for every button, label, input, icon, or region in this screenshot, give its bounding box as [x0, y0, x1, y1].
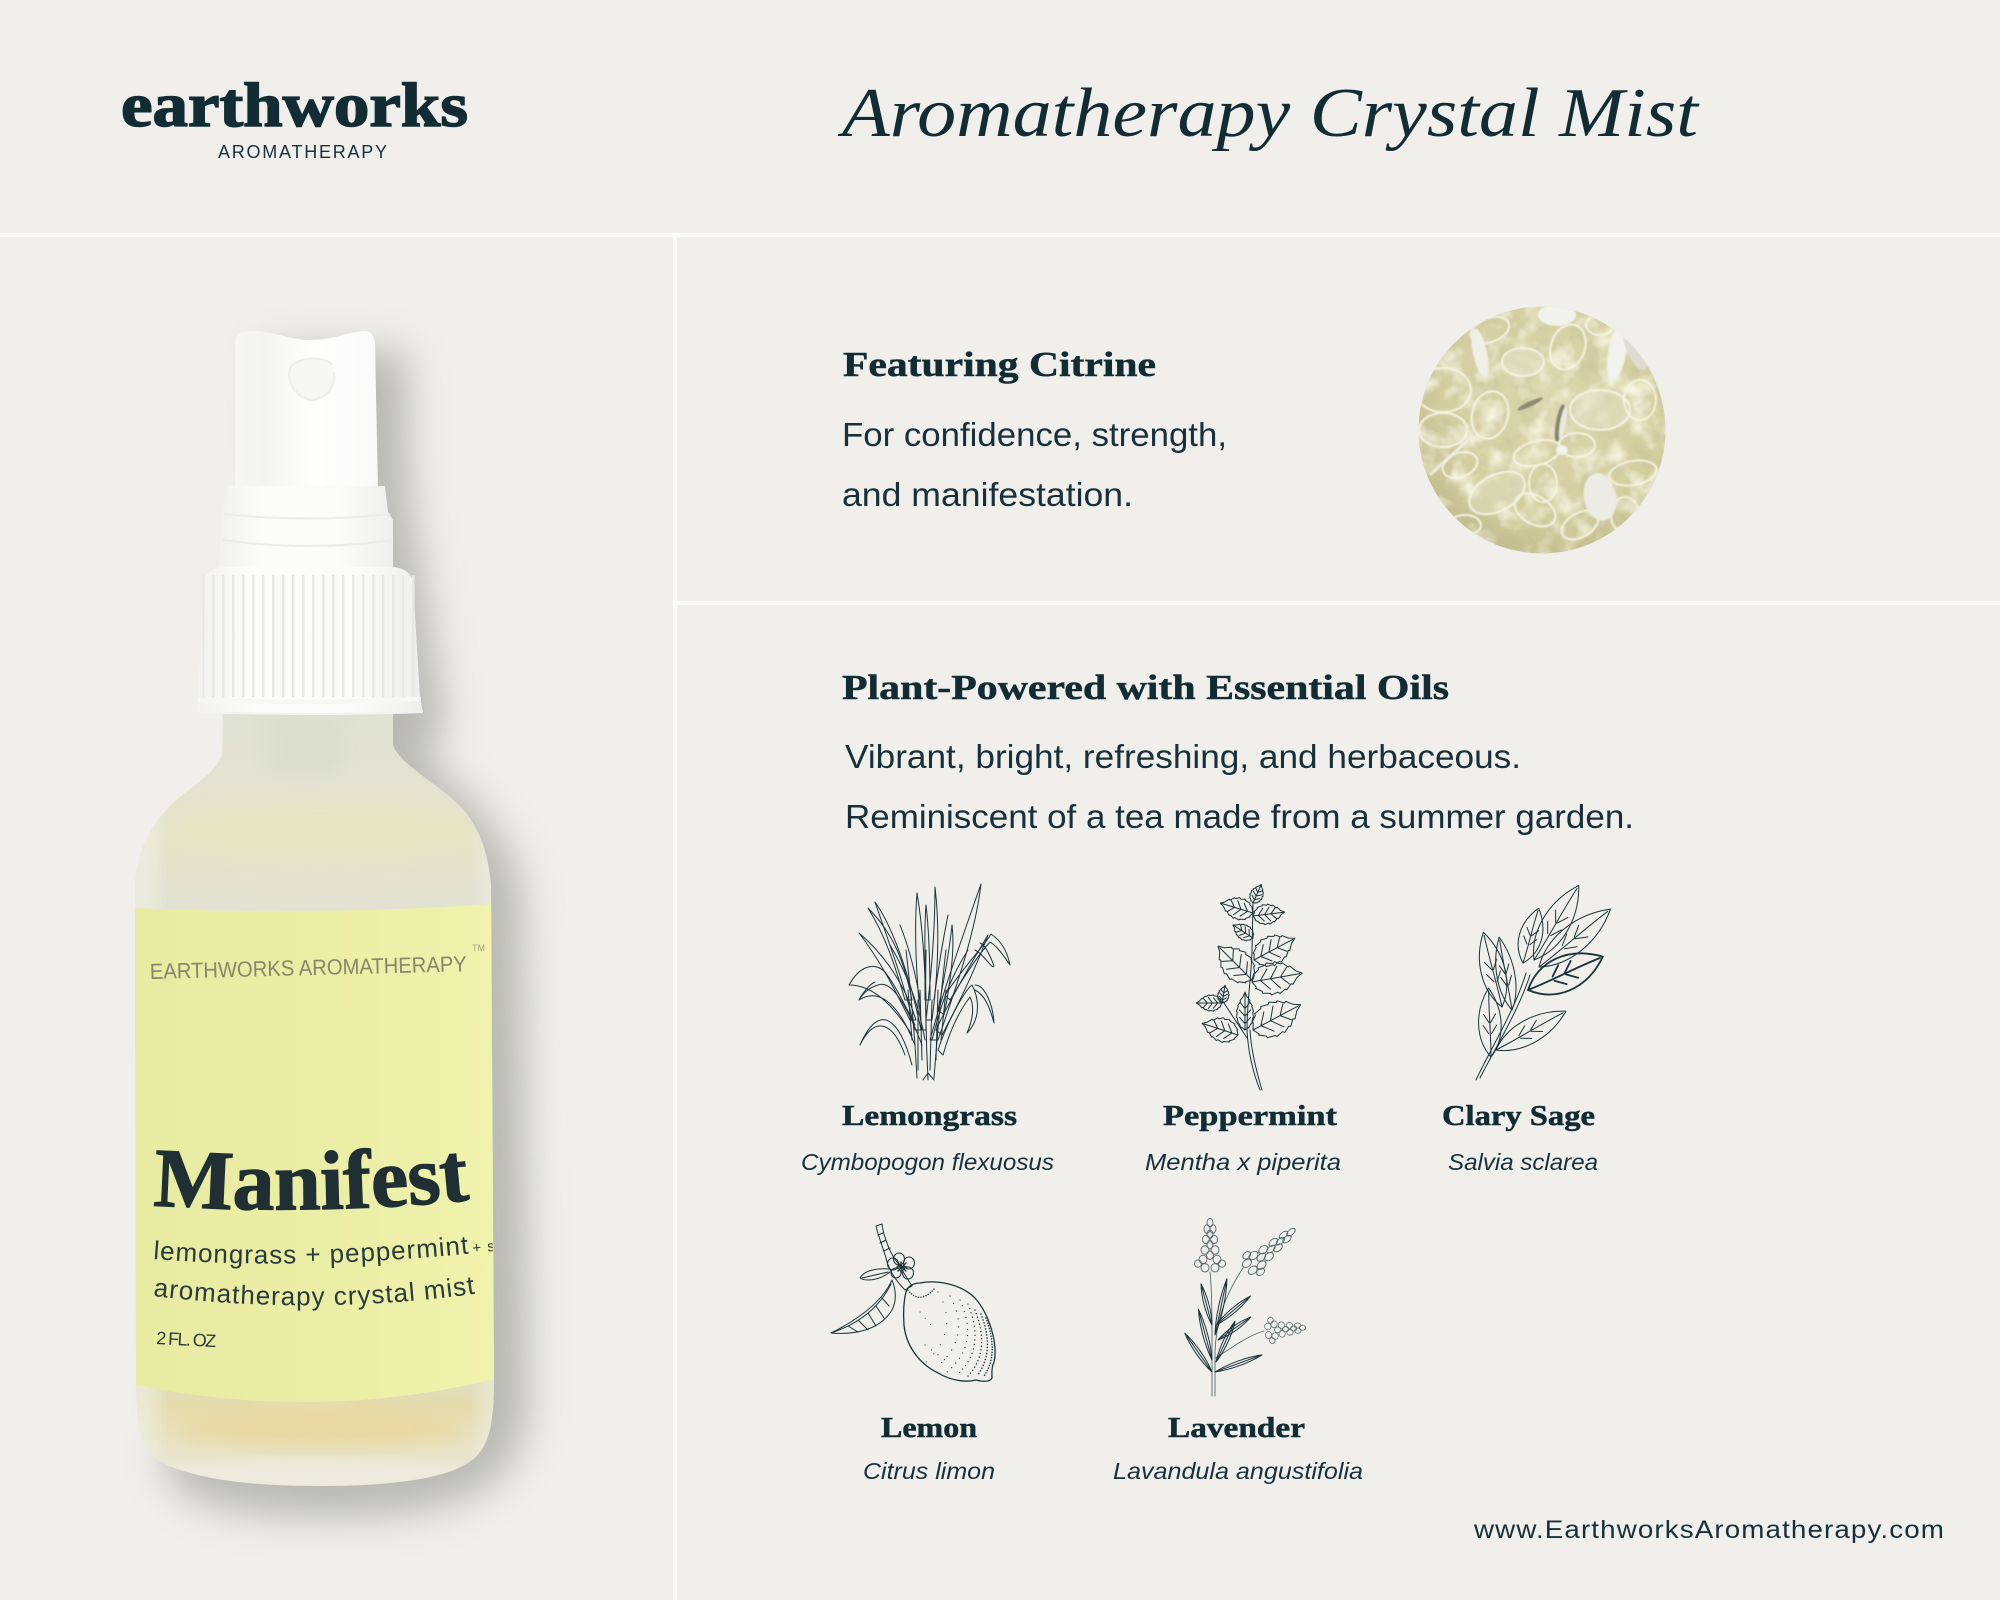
oils description: Vibrant, bright, refreshing, and herbaceous. — [845, 738, 1521, 775]
label text — [151, 944, 493, 1348]
panel: essential oils — [801, 668, 1634, 1484]
logo: earthworks aromatherapy — [121, 72, 468, 162]
icon: clary sage — [1472, 878, 1619, 1080]
label text: EARTHWORKS AROMATHERAPY — [150, 951, 467, 984]
label: lavender — [1113, 1413, 1363, 1484]
website url: www.EarthworksAromatherapy.com — [1473, 1516, 1945, 1544]
label: clary sage: Clary Sage — [1442, 1101, 1595, 1132]
label — [134, 904, 495, 1402]
collar — [219, 486, 393, 568]
label: peppermint: Mentha x piperita — [1145, 1149, 1341, 1175]
citrine description: For confidence, strength, — [842, 416, 1227, 453]
bottle shadow — [165, 350, 528, 1517]
label: lemongrass: Lemongrass — [842, 1101, 1017, 1132]
citrine description — [842, 416, 1227, 513]
label: lemongrass — [801, 1101, 1055, 1175]
blossom — [888, 1253, 914, 1279]
label: clary sage — [1442, 1101, 1598, 1175]
citrine crystal photo — [1415, 304, 1670, 555]
label text: Manifest — [154, 1148, 470, 1211]
label text: aromatherapy crystal mist — [154, 1277, 475, 1311]
label: lavender: Lavender — [1168, 1413, 1305, 1444]
oils description: Reminiscent of a tea made from a summer garden. — [845, 798, 1634, 835]
logo: earthworks aromatherapy: earthworks — [121, 72, 468, 140]
label: lemongrass: Cymbopogon flexuosus — [801, 1149, 1055, 1175]
label: lemon: Lemon — [881, 1413, 977, 1444]
label text: TM — [472, 943, 485, 953]
spray pump — [235, 331, 378, 490]
label: lemon — [863, 1413, 995, 1484]
panel: featuring citrine — [842, 304, 1670, 555]
product photo: Manifest spray bottle — [135, 329, 548, 1538]
label: lemon: Citrus limon — [863, 1458, 995, 1484]
title: Aromatherapy Crystal Mist — [838, 75, 1700, 152]
label text: lemongrass + peppermint + sage — [154, 1237, 493, 1268]
oils description — [845, 738, 1634, 835]
logo: earthworks aromatherapy: AROMATHERAPY — [218, 142, 387, 162]
glass body — [135, 714, 494, 1486]
label text: 2 FL. OZ — [156, 1328, 217, 1351]
label: peppermint — [1145, 1101, 1341, 1175]
heading: plant-powered with essential oils: Plant-Powered with Essential Oils — [842, 668, 1449, 707]
icon: peppermint — [1196, 882, 1309, 1090]
label: peppermint: Peppermint — [1163, 1101, 1338, 1132]
heading: featuring citrine: Featuring Citrine — [843, 345, 1156, 384]
citrine description: and manifestation. — [842, 476, 1133, 513]
label: lavender: Lavandula angustifolia — [1113, 1458, 1363, 1484]
ribbed cap — [196, 567, 423, 714]
icon: lemongrass — [849, 884, 1010, 1080]
label: clary sage: Salvia sclarea — [1448, 1149, 1598, 1175]
icon: lavender — [1183, 1218, 1307, 1396]
icon: lemon — [831, 1224, 995, 1381]
